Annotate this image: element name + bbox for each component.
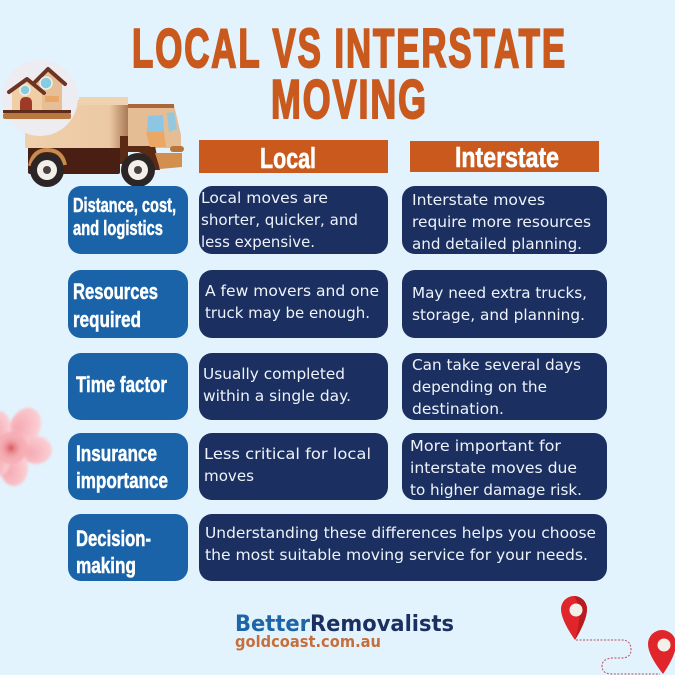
label: time factor: Time factor [76,372,167,397]
local: distance: shorter, quicker, and [201,211,358,229]
header: Local: Local [260,143,316,175]
interstate: insurance: More important for [410,437,562,455]
local: insurance: Less critical for local [204,445,371,463]
summary: Understanding these differences helps you choose [205,524,596,542]
interstate: distance: require more resources [412,213,591,231]
interstate: time: destination. [412,400,504,418]
label: resources required: Resources [73,279,158,304]
interstate: resources: May need extra trucks, [412,284,587,302]
interstate: time: Can take several days [412,356,581,374]
local: time [199,353,388,420]
local: distance: less expensive. [201,233,315,251]
row: resources [68,270,607,338]
local: resources: truck may be enough. [205,304,370,322]
interstate: distance [402,186,607,254]
title: MOVING [271,68,428,130]
local: time: within a single day. [203,387,351,405]
interstate: insurance: interstate moves due [410,459,577,477]
label: insurance importance: importance [76,468,168,493]
title [132,17,567,130]
interstate: time: depending on the [412,378,547,396]
label: distance, cost, and logistics [68,186,188,254]
label: resources required: required [73,307,141,332]
header: Interstate: Interstate [455,142,559,174]
summary [199,514,607,581]
label: decision-making: making [76,553,136,578]
label: insurance importance: Insurance [76,441,157,466]
logo [235,612,454,651]
logo: Removalists [310,612,454,637]
local: resources [199,270,388,338]
local: time: Usually completed [203,365,345,383]
header: Local [199,140,388,175]
label: decision-making: Decision- [76,526,151,551]
icon: house badge [2,60,78,136]
label: decision-making [68,514,188,581]
interstate: resources: storage, and planning. [412,306,585,324]
local: distance: Local moves are [201,189,328,207]
interstate: time [402,353,607,420]
icon: route with map pins [561,596,675,674]
interstate: resources [402,270,607,338]
logo: goldcoast.com.au [235,632,381,651]
header: Interstate [410,141,599,174]
summary: the most suitable moving service for your needs. [205,546,588,564]
label: time factor [68,353,188,420]
local: insurance [199,433,388,500]
interstate: distance: and detailed planning. [412,235,582,253]
local: distance [199,186,388,254]
row: decision-making [68,514,607,581]
interstate: insurance: to higher damage risk. [410,481,582,499]
label: insurance importance [68,433,188,500]
local: insurance: moves [204,467,254,485]
interstate: distance: Interstate moves [412,191,545,209]
local: resources: A few movers and one [205,282,379,300]
label: resources required [68,270,188,338]
label: distance, cost, and logistics: Distance, cost, [73,195,176,217]
row: distance, cost, logistics [68,186,607,254]
interstate: insurance [402,433,607,500]
icon: moving truck [25,97,184,187]
row: insurance [68,433,607,500]
row: time factor [68,353,607,420]
label: distance, cost, and logistics: and logistics [73,218,163,240]
icon: flower [0,403,52,486]
logo: Better [235,612,310,637]
